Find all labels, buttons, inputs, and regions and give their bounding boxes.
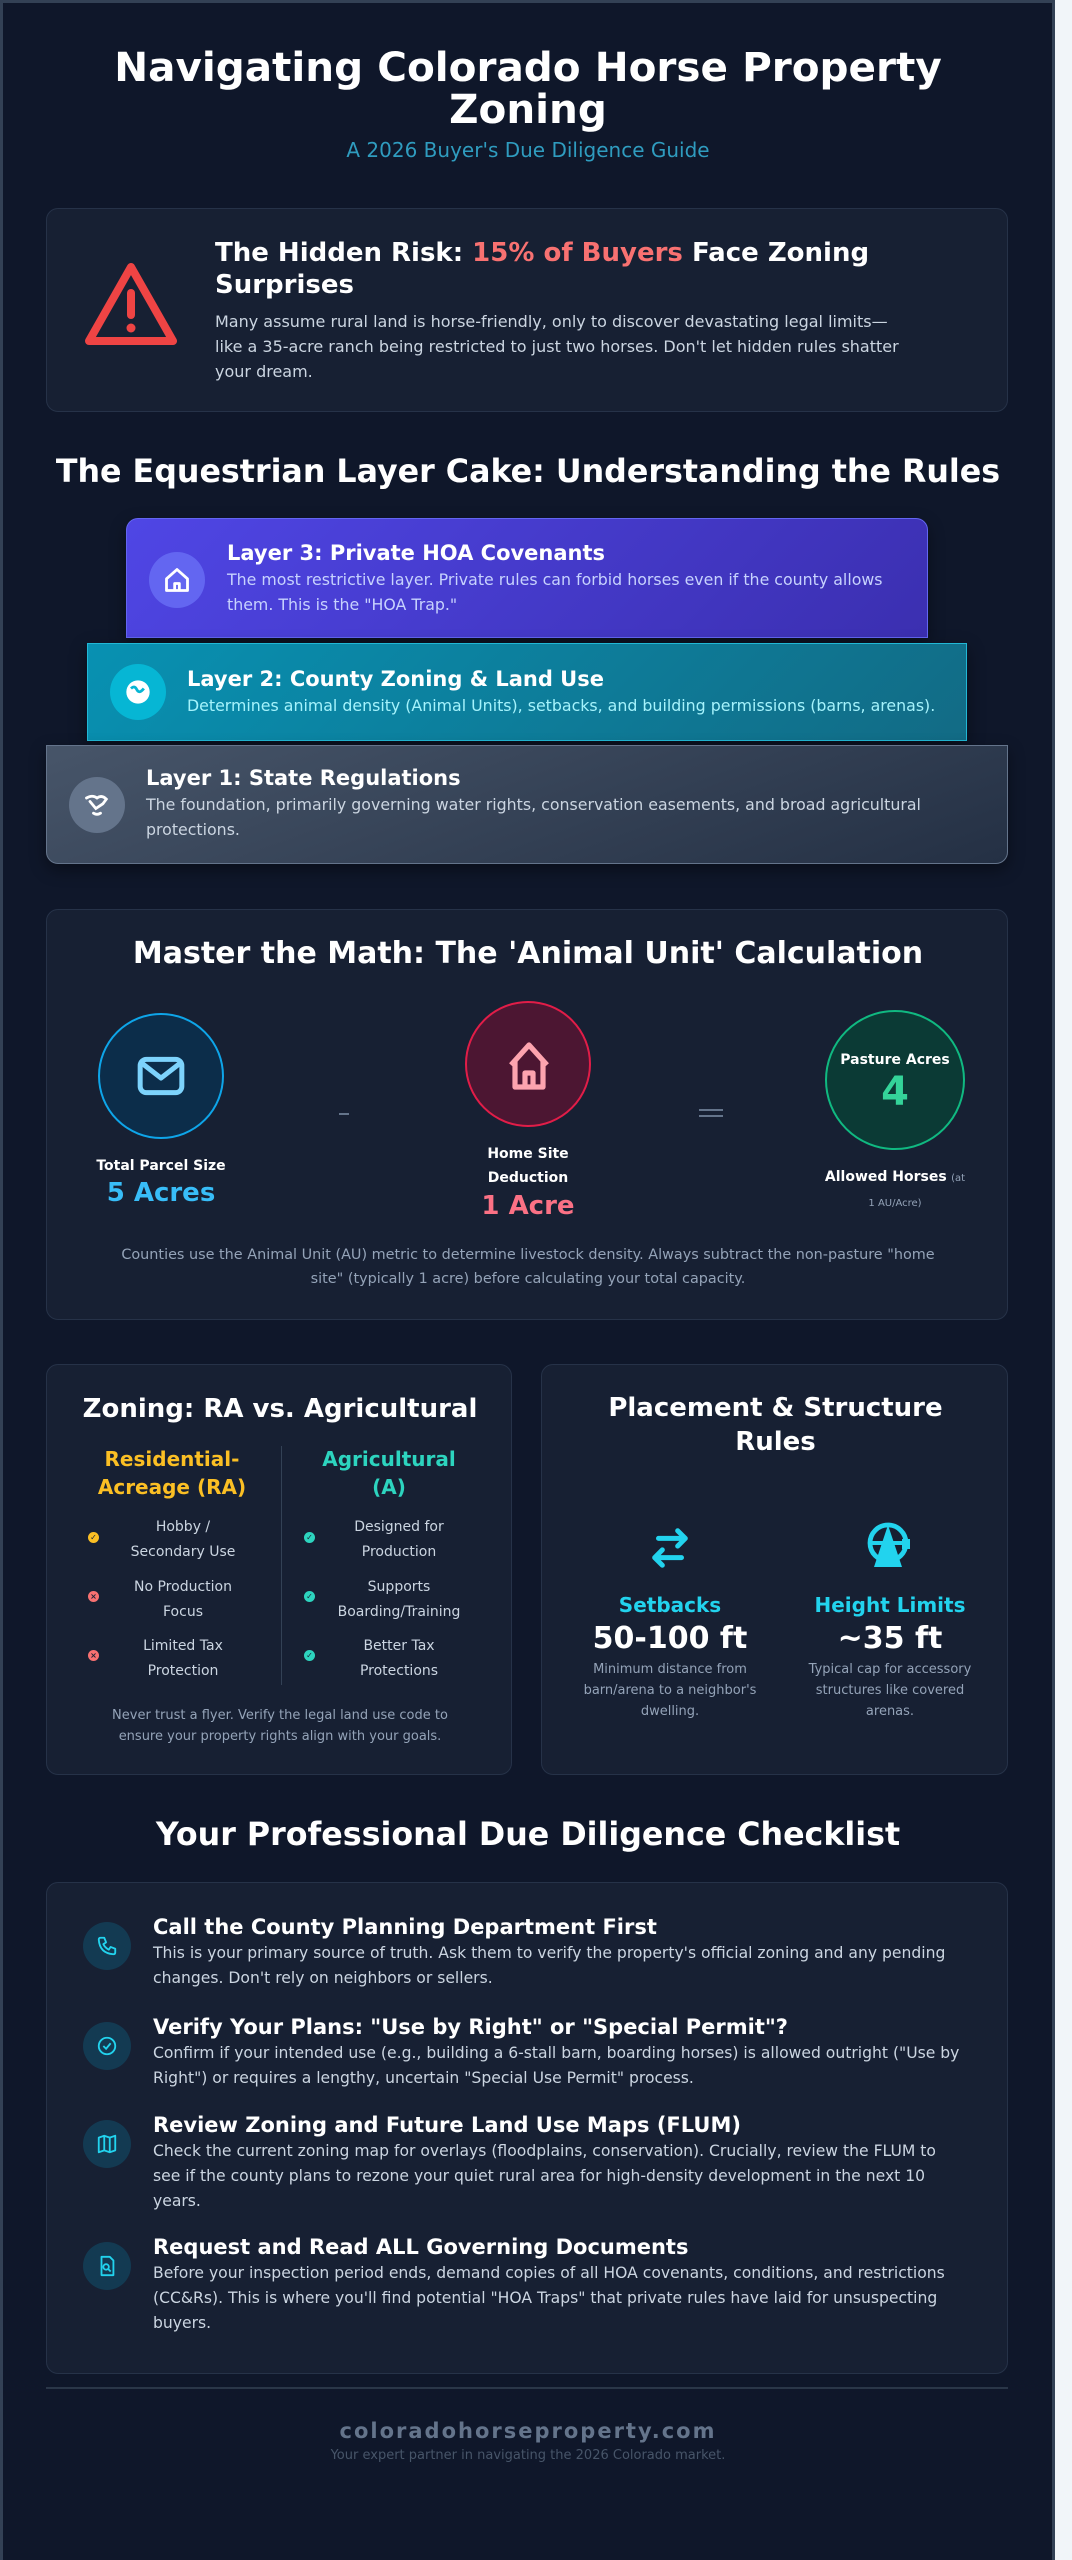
- column: Agricultural: ✓: [306, 1592, 313, 1601]
- placement title: [608, 1393, 943, 1457]
- layer 1 text: Layer 1: State Regulations: [146, 766, 461, 790]
- item 2: Verify Your Plans: "Use by Right" or "Special Permit"?: [153, 2015, 788, 2039]
- math title: Master the Math: The 'Animal Unit' Calculation: [133, 936, 923, 971]
- column: RA: ×: [90, 1651, 97, 1660]
- heading: checklist: Your Professional Due Diligence Checklist: [156, 1817, 900, 1853]
- operator: minus: [339, 1113, 349, 1115]
- column: RA: Hobby /: [156, 1519, 210, 1535]
- label: allowed horses: [825, 1169, 965, 1209]
- item 4: buyers.: [153, 2314, 211, 2332]
- stat: setbacks: dwelling.: [641, 1704, 699, 1719]
- panel: animal unit math: [46, 909, 1008, 1320]
- icon: state: [69, 777, 125, 833]
- item 1: changes. Don't rely on neighbors or sellers.: [153, 1969, 493, 1987]
- column: RA: Secondary Use: [131, 1544, 235, 1560]
- stat: setbacks: Minimum distance from: [593, 1662, 747, 1677]
- math footnote: site" (typically 1 acre) before calculating your total capacity.: [311, 1271, 745, 1287]
- column: Agricultural: Supports: [368, 1579, 430, 1595]
- layer 3 text: The most restrictive layer. Private rules can forbid horses even if the county allows: [227, 570, 883, 589]
- circle: pasture: [825, 1010, 965, 1150]
- item 2: Right") or requires a lengthy, uncertain "Special Use Permit" process.: [153, 2069, 694, 2087]
- risk body: [215, 312, 899, 381]
- zoning footnote: Never trust a flyer. Verify the legal land use code to: [112, 1708, 448, 1723]
- footer: coloradohorseproperty.com: [340, 2419, 716, 2443]
- stat: height limits: [808, 1593, 971, 1719]
- circle: home site: [465, 1001, 591, 1127]
- label: home site: Deduction: [488, 1170, 568, 1186]
- column: RA: Limited Tax: [143, 1638, 223, 1654]
- icon: house: [149, 552, 205, 608]
- layer 3 text: them. This is the "HOA Trap.": [227, 595, 457, 614]
- panel: placement rules: [541, 1364, 1008, 1775]
- risk heading: [215, 238, 869, 300]
- label: total parcel: 5 Acres: [107, 1178, 215, 1208]
- zoning title: Zoning: RA vs. Agricultural: [83, 1394, 477, 1424]
- title: Zoning: [449, 85, 607, 133]
- stat: height limits: structures like covered: [816, 1683, 964, 1698]
- stat: height limits: Height Limits: [814, 1593, 966, 1617]
- heading: layer cake: The Equestrian Layer Cake: Understanding the Rules: [56, 454, 1000, 490]
- operator: equals: [699, 1109, 723, 1117]
- panel: checklist: [46, 1882, 1008, 2374]
- stat: setbacks: 50-100 ft: [593, 1621, 747, 1656]
- risk body: your dream.: [215, 362, 313, 381]
- stat: setbacks: [584, 1593, 756, 1719]
- item 4: (CC&Rs). This is where you'll find potential "HOA Traps" that private rules have laid for unsuspecting: [153, 2289, 937, 2307]
- layer 2 text: Determines animal density (Animal Units), setbacks, and building permissions (barns, arenas).: [187, 696, 935, 715]
- risk body: like a 35-acre ranch being restricted to just two horses. Don't let hidden rules shatter: [215, 337, 899, 356]
- item 3: years.: [153, 2192, 201, 2210]
- layer 1 text: [146, 766, 921, 839]
- stat: height limits: ~35 ft: [838, 1621, 942, 1656]
- circle: pasture: 4: [881, 1069, 909, 1115]
- zoning footnote: ensure your property rights align with your goals.: [119, 1729, 441, 1744]
- label: home site: Home Site: [487, 1146, 569, 1162]
- placement title: Placement & Structure: [608, 1393, 943, 1423]
- column: Agricultural: [304, 1447, 460, 1679]
- column: RA: Residential-: [105, 1447, 239, 1471]
- column: Agricultural: Protections: [360, 1663, 438, 1679]
- column: RA: [88, 1447, 246, 1679]
- layer 2 text: Layer 2: County Zoning & Land Use: [187, 667, 604, 691]
- column: Agricultural: Better Tax: [363, 1638, 435, 1654]
- icon: arrows: [652, 1528, 688, 1568]
- item 4: [83, 2235, 945, 2332]
- item 3: Review Zoning and Future Land Use Maps (FLUM): [153, 2113, 741, 2137]
- column: Agricultural: ✓: [306, 1533, 313, 1542]
- circle: pasture: Pasture Acres: [840, 1052, 950, 1068]
- column: Agricultural: ✓: [306, 1651, 313, 1660]
- column: RA: Acreage (RA): [98, 1475, 246, 1499]
- icon: warning triangle: [85, 263, 177, 345]
- risk heading: The Hidden Risk: 15% of Buyers Face Zoning: [215, 238, 869, 268]
- column: RA: ✓: [90, 1533, 97, 1542]
- layer 2: [87, 643, 967, 741]
- item 1: Call the County Planning Department First: [153, 1915, 657, 1939]
- footer: Your expert partner in navigating the 2026 Colorado market.: [331, 2448, 725, 2463]
- column: Agricultural: Boarding/Training: [338, 1604, 460, 1620]
- math footnote: [121, 1247, 935, 1287]
- subtitle: A 2026 Buyer's Due Diligence Guide: [346, 138, 710, 162]
- item 2: Confirm if your intended use (e.g., building a 6-stall barn, boarding horses) is allowed outright ("Use by: [153, 2044, 959, 2062]
- item 3: see if the county plans to rezone your quiet rural area for high-density development in the next 10: [153, 2167, 925, 2185]
- column: Agricultural: Production: [362, 1544, 436, 1560]
- column: RA: ×: [90, 1592, 97, 1601]
- label: home site: [481, 1146, 575, 1221]
- circle: total parcel: [98, 1013, 224, 1139]
- zoning footnote: [112, 1708, 448, 1744]
- label: allowed horses: Allowed Horses (at: [825, 1169, 965, 1185]
- item 3: Check the current zoning map for overlays (floodplains, conservation). Crucially, review the FLUM to: [153, 2142, 936, 2160]
- column: Agricultural: Designed for: [354, 1519, 444, 1535]
- layer 1 text: The foundation, primarily governing water rights, conservation easements, and broad agricultural: [146, 795, 921, 814]
- stat: height limits: Typical cap for accessory: [809, 1662, 971, 1677]
- stat: setbacks: Setbacks: [619, 1593, 721, 1617]
- layer 3: [126, 518, 928, 638]
- item 3: [83, 2113, 936, 2210]
- stat: setbacks: barn/arena to a neighbor's: [584, 1683, 756, 1698]
- layer 3 text: [226, 541, 883, 614]
- label: allowed horses: 1 AU/Acre): [868, 1198, 922, 1209]
- item 1: This is your primary source of truth. Ask them to verify the property's official zoning and any pending: [153, 1944, 945, 1962]
- footer: [330, 2419, 725, 2463]
- title: Navigating Colorado Horse Property: [114, 43, 942, 91]
- label: total parcel: [96, 1158, 226, 1208]
- column: RA: No Production: [134, 1579, 232, 1595]
- column: Agricultural: (A): [372, 1475, 406, 1499]
- risk heading: Surprises: [215, 270, 354, 300]
- label: total parcel: Total Parcel Size: [96, 1158, 226, 1174]
- layer 1 text: protections.: [146, 820, 240, 839]
- item 4: Request and Read ALL Governing Documents: [153, 2235, 688, 2259]
- placement title: Rules: [735, 1427, 816, 1457]
- layer 3 text: Layer 3: Private HOA Covenants: [227, 541, 605, 565]
- label: home site: 1 Acre: [481, 1191, 575, 1221]
- layer 2 text: [187, 667, 935, 715]
- item 4: Before your inspection period ends, demand copies of all HOA covenants, conditions, and restrictions: [153, 2264, 945, 2282]
- column: Agricultural: Agricultural: [322, 1447, 456, 1471]
- layer 1: [46, 745, 1008, 864]
- math footnote: Counties use the Animal Unit (AU) metric to determine livestock density. Always subtract the non-pasture "home: [121, 1247, 935, 1263]
- column: RA: Focus: [163, 1604, 203, 1620]
- risk body: Many assume rural land is horse-friendly, only to discover devastating legal limits—: [215, 312, 888, 331]
- icon: county: [110, 664, 166, 720]
- panel: zoning comparison: [46, 1364, 512, 1775]
- stat: height limits: arenas.: [866, 1704, 914, 1719]
- title: [114, 43, 942, 133]
- item 2: [83, 2015, 959, 2087]
- item 1: [83, 1915, 945, 1987]
- column: RA: Protection: [148, 1663, 218, 1679]
- panel: hidden risk: [46, 208, 1008, 412]
- icon: ferris wheel: [868, 1522, 910, 1567]
